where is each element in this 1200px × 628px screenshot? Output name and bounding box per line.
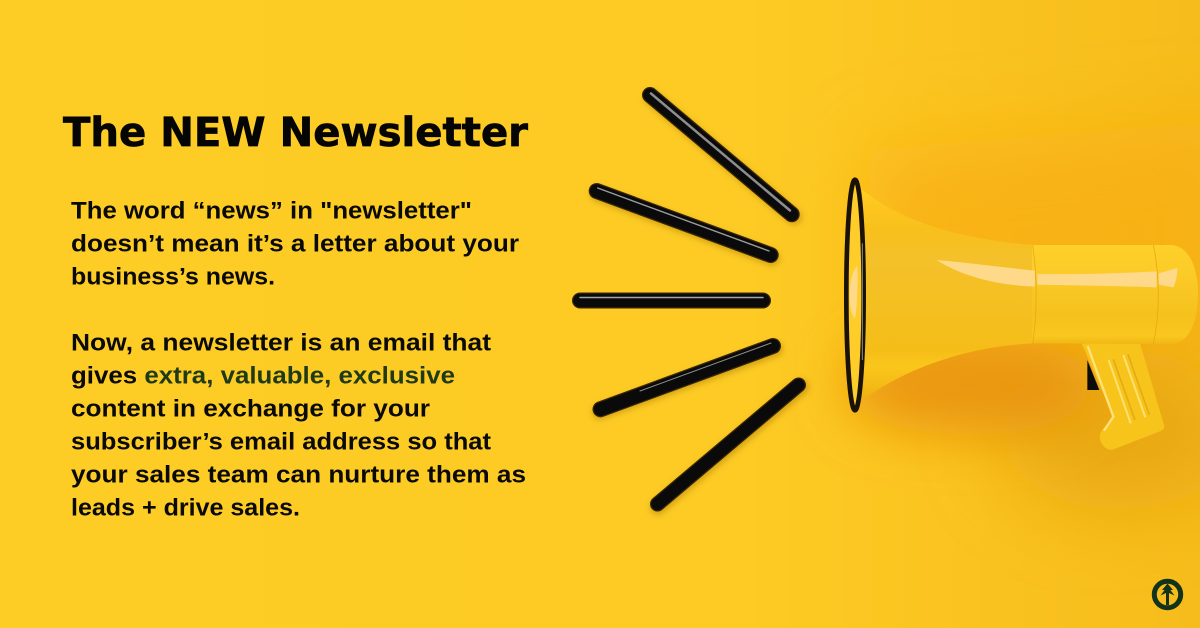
text block: definition paragraph (71, 330, 526, 522)
megaphone seams (1033, 245, 1158, 344)
text block: definition paragraph: your sales team can nurture them as (71, 462, 526, 488)
text block: definition paragraph: leads + drive sales. (71, 494, 300, 522)
megaphone highlights (937, 260, 1177, 287)
text block: definition paragraph: Now, a newsletter is an email that (71, 330, 491, 356)
text block: intro paragraph: business’s news. (71, 264, 275, 290)
title: The NEW Newsletter (63, 110, 528, 156)
icon: sound lines (578, 94, 801, 507)
icon: megaphone (846, 180, 1198, 450)
text block: definition paragraph: content in exchange for your (71, 396, 430, 422)
sound line 1 (650, 94, 794, 217)
megaphone body (1032, 245, 1198, 344)
text block: intro paragraph (71, 198, 519, 290)
text block: intro paragraph: doesn’t mean it’s a letter about your (71, 230, 519, 258)
sound line 2 (597, 188, 772, 258)
sound line 5 (658, 385, 801, 507)
text block: definition paragraph: subscriber’s email address so that (71, 428, 491, 456)
sound line 3 (578, 298, 764, 303)
megaphone rim (846, 180, 864, 410)
sound line 4 (600, 343, 775, 412)
megaphone trigger (1087, 360, 1099, 390)
megaphone horn (862, 189, 1033, 401)
text block: intro paragraph: The word “news” in "newsletter" (71, 198, 472, 224)
icon: tree logo (1154, 581, 1181, 608)
text block: definition paragraph: gives extra, valuable, exclusive (71, 362, 455, 390)
megaphone handle (1082, 343, 1164, 450)
